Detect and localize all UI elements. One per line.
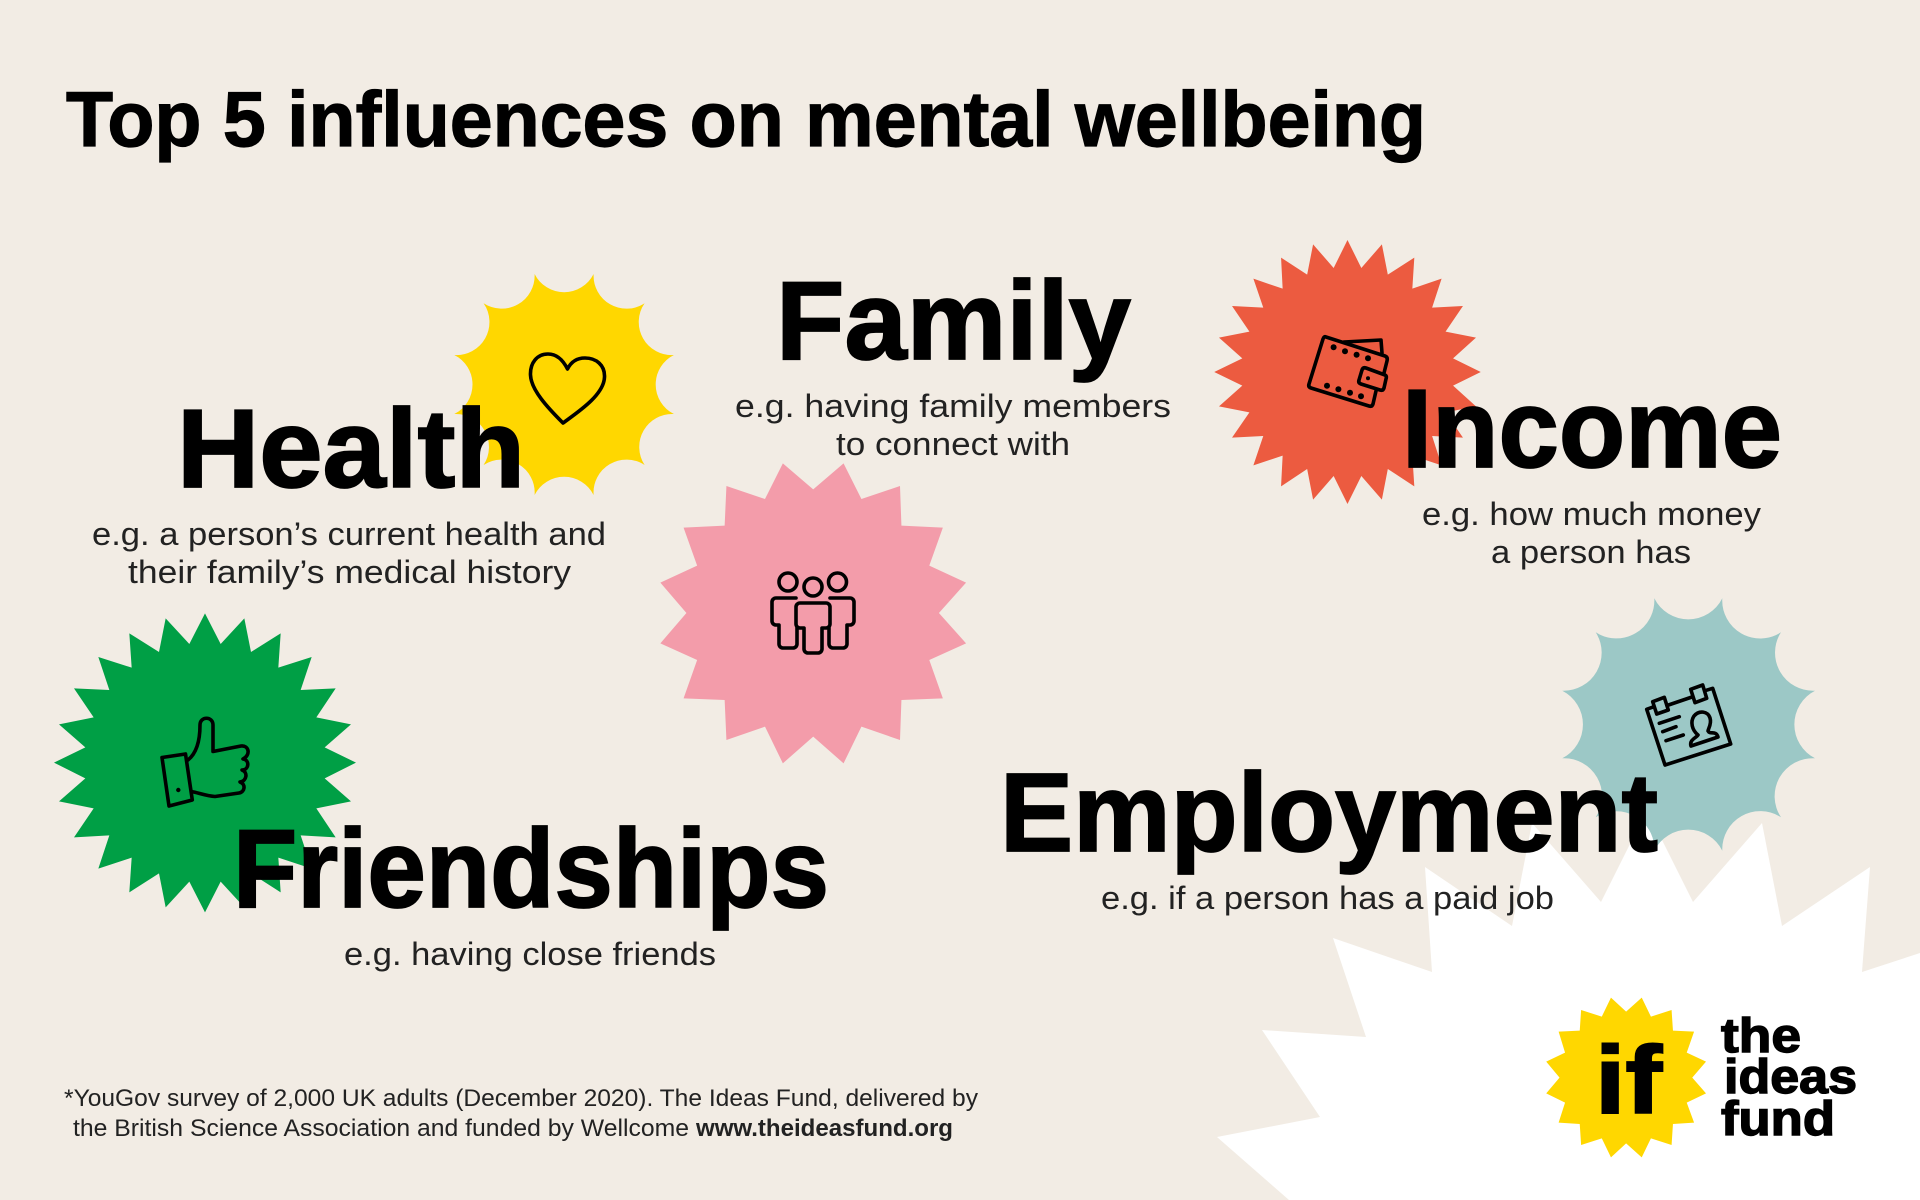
heading: income: Income	[1402, 367, 1782, 491]
text block: employment	[1000, 751, 1658, 916]
description: family: e.g. having family members	[735, 388, 1171, 424]
yellow scalloped star: health	[454, 274, 674, 495]
description: health	[92, 516, 606, 590]
heading: family: Family	[776, 259, 1131, 383]
description: income: e.g. how much money	[1422, 496, 1761, 532]
footnote: the British Science Association and funded by Wellcome	[73, 1115, 689, 1142]
heading: employment: Employment	[1000, 751, 1658, 875]
text block: friendships	[233, 807, 829, 972]
description: health: e.g. a person’s current health and	[92, 516, 606, 552]
logo: the ideas fund	[1546, 998, 1857, 1157]
description: family	[735, 388, 1171, 462]
icon: heart	[530, 354, 605, 423]
text block: family	[735, 259, 1171, 462]
green star: friendships	[54, 613, 356, 912]
footnote: www.theideasfund.org	[695, 1115, 953, 1142]
logo wordmark	[1721, 1010, 1857, 1146]
logo wordmark: fund	[1721, 1093, 1835, 1146]
logo mark: if: if	[1595, 1027, 1663, 1134]
description: income: a person has	[1491, 534, 1691, 570]
title: Top 5 influences on mental wellbeing	[66, 75, 1426, 163]
icon: thumbs up	[162, 718, 248, 806]
logo wordmark: ideas	[1724, 1051, 1857, 1104]
logo star	[1546, 998, 1706, 1157]
logo wordmark: the	[1721, 1010, 1801, 1063]
footnote: *YouGov survey of 2,000 UK adults (December 2020). The Ideas Fund, delivered by	[64, 1085, 978, 1112]
white starburst behind logo	[1217, 810, 1920, 1200]
text block: income	[1402, 367, 1782, 570]
heading: friendships: Friendships	[233, 807, 829, 931]
icon: ID badge	[1647, 685, 1731, 765]
description: employment: e.g. if a person has a paid job	[1101, 880, 1554, 916]
icon: wallet	[1309, 337, 1387, 406]
pink star: family	[660, 463, 966, 763]
icon: family of three people	[772, 573, 854, 653]
description: family: to connect with	[836, 426, 1070, 462]
red star: income	[1214, 240, 1481, 504]
description: health: their family’s medical history	[128, 554, 571, 590]
footnote	[64, 1085, 978, 1142]
heading: health: Health	[177, 387, 525, 511]
description: friendships: e.g. having close friends	[344, 936, 716, 972]
teal scalloped star: employment	[1562, 598, 1815, 851]
text block: health	[92, 387, 606, 590]
description: income	[1422, 496, 1761, 570]
